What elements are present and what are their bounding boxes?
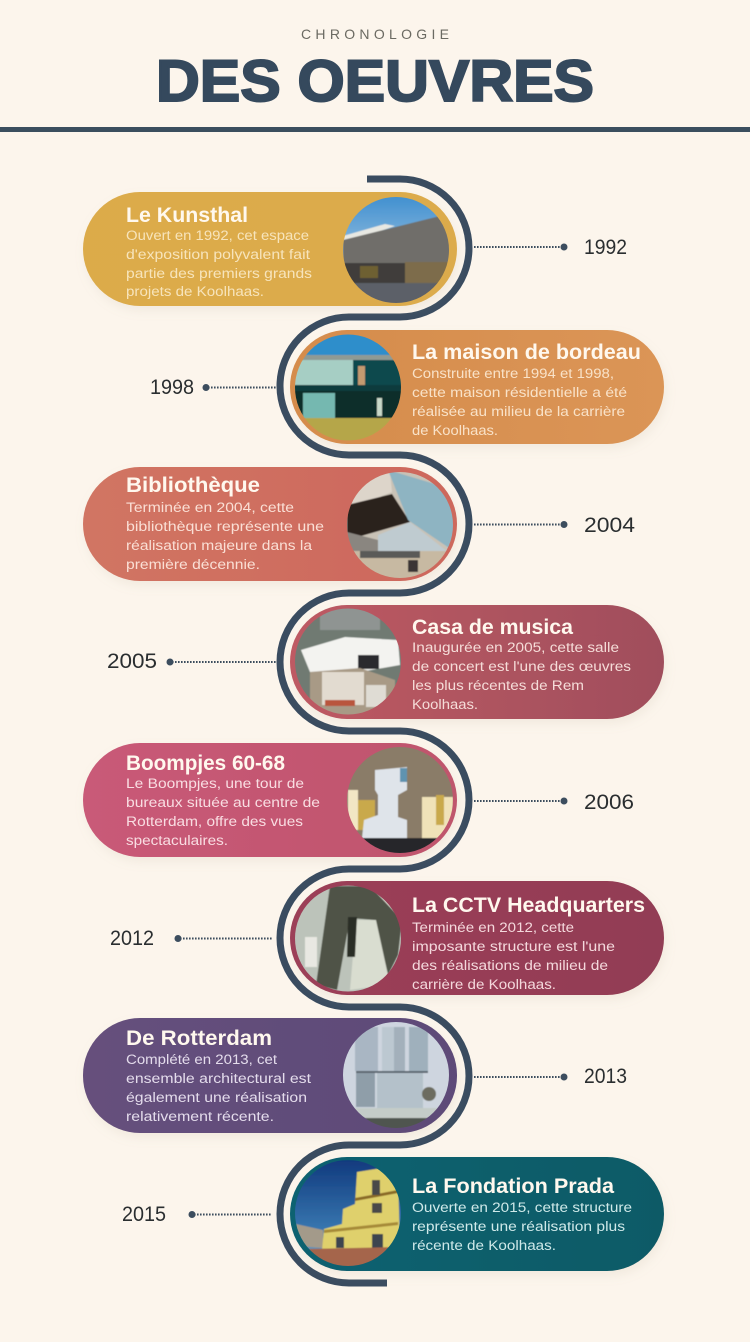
description: réalisation majeure dans la bbox=[126, 538, 313, 553]
description: Rotterdam, offre des vues bbox=[126, 814, 303, 829]
description: Terminée en 2012, cette bbox=[412, 920, 574, 935]
description bbox=[126, 500, 324, 572]
photo: Kunsthal bbox=[340, 195, 453, 305]
description: bibliothèque représente une bbox=[126, 519, 324, 534]
panel: Casa de musica bbox=[290, 605, 664, 719]
description: récente de Koolhaas. bbox=[412, 1238, 556, 1253]
year: 1992 bbox=[474, 236, 627, 259]
header bbox=[0, 26, 750, 132]
description: des réalisations de milieu de bbox=[412, 958, 608, 973]
description: de Koolhaas. bbox=[412, 423, 498, 438]
description: Ouverte en 2015, cette structure bbox=[412, 1200, 632, 1215]
year: 2006 bbox=[474, 791, 634, 814]
photo: Casa da Musica bbox=[293, 606, 403, 718]
pill bbox=[290, 605, 664, 719]
description: partie des premiers grands bbox=[126, 266, 312, 281]
year: 2006: 2006 bbox=[584, 791, 634, 814]
description: Koolhaas. bbox=[412, 697, 478, 712]
description bbox=[126, 228, 312, 299]
heading: Casa de musica bbox=[412, 616, 573, 639]
panel: Boompjes 60-68 bbox=[83, 743, 457, 857]
description bbox=[412, 920, 615, 992]
description: cette maison résidentielle a été bbox=[412, 385, 627, 400]
heading: La CCTV Headquarters bbox=[412, 894, 645, 917]
description: ensemble architectural est bbox=[126, 1071, 311, 1086]
photo: De Rotterdam bbox=[341, 1020, 451, 1130]
description: de concert est l'une des œuvres bbox=[412, 659, 631, 674]
title: DES OEUVRES bbox=[156, 49, 594, 114]
description bbox=[412, 640, 631, 712]
description: Terminée en 2004, cette bbox=[126, 500, 294, 515]
description bbox=[412, 366, 627, 438]
panel: La CCTV Headquarters bbox=[290, 881, 664, 995]
heading: La Fondation Prada bbox=[412, 1175, 614, 1198]
panel: Le Kunsthal bbox=[83, 192, 457, 306]
pill bbox=[290, 330, 664, 444]
pill bbox=[290, 881, 664, 995]
serpentine timeline path bbox=[280, 179, 469, 1283]
panel: Bibliothèque bbox=[83, 467, 457, 581]
year: 2005: 2005 bbox=[107, 650, 157, 673]
pill bbox=[83, 192, 457, 306]
description: Construite entre 1994 et 1998, bbox=[412, 366, 614, 381]
description: imposante structure est l'une bbox=[412, 939, 615, 954]
description: relativement récente. bbox=[126, 1109, 274, 1124]
heading: Bibliothèque bbox=[126, 474, 260, 497]
description: Inaugurée en 2005, cette salle bbox=[412, 640, 619, 655]
description bbox=[412, 1200, 632, 1253]
pill bbox=[83, 467, 457, 581]
year: 2005 bbox=[107, 650, 276, 673]
description: Le Boompjes, une tour de bbox=[126, 776, 304, 791]
heading: Boompjes 60-68 bbox=[126, 752, 285, 775]
photo: CCTV bbox=[293, 884, 403, 994]
year: 2012 bbox=[110, 927, 272, 950]
year: 2004: 2004 bbox=[584, 514, 635, 537]
description bbox=[126, 1052, 311, 1124]
description: représente une réalisation plus bbox=[412, 1219, 625, 1234]
panel: La Fondation Prada bbox=[290, 1157, 664, 1271]
heading: Le Kunsthal bbox=[126, 204, 248, 227]
description: spectaculaires. bbox=[126, 833, 228, 848]
description bbox=[126, 776, 320, 848]
panel: La maison de bordeau bbox=[290, 330, 664, 444]
year: 2012: 2012 bbox=[110, 927, 154, 950]
description: d'exposition polyvalent fait bbox=[126, 247, 310, 262]
panel: De Rotterdam bbox=[83, 1018, 457, 1133]
subtitle: CHRONOLOGIE bbox=[301, 26, 449, 42]
description: également une réalisation bbox=[126, 1090, 307, 1105]
year: 2015 bbox=[122, 1203, 272, 1226]
pill bbox=[83, 743, 457, 857]
heading: La maison de bordeau bbox=[412, 341, 641, 364]
year: 2015: 2015 bbox=[122, 1203, 166, 1226]
pill bbox=[83, 1018, 457, 1133]
year: 2013: 2013 bbox=[584, 1065, 627, 1088]
year: 1998: 1998 bbox=[150, 376, 194, 399]
year: 2013 bbox=[474, 1065, 627, 1088]
year: 2004 bbox=[474, 514, 635, 537]
photo: Boompjes bbox=[345, 745, 455, 856]
description: projets de Koolhaas. bbox=[126, 284, 264, 299]
heading: De Rotterdam bbox=[126, 1027, 272, 1050]
year: 1998 bbox=[150, 376, 276, 399]
description: réalisée au milieu de la carrière bbox=[412, 404, 625, 419]
photo: Bibliothèque bbox=[345, 470, 455, 581]
description: première décennie. bbox=[126, 557, 260, 572]
description: Complété en 2013, cet bbox=[126, 1052, 277, 1067]
year: 1992: 1992 bbox=[584, 236, 627, 259]
photo: Fondation Prada bbox=[293, 1160, 403, 1268]
description: Ouvert en 1992, cet espace bbox=[126, 228, 309, 243]
description: carrière de Koolhaas. bbox=[412, 977, 556, 992]
photo: maison de Bordeaux bbox=[293, 333, 403, 442]
description: les plus récentes de Rem bbox=[412, 678, 584, 693]
description: bureaux située au centre de bbox=[126, 795, 320, 810]
pill bbox=[290, 1157, 664, 1271]
header rule bbox=[0, 127, 750, 132]
